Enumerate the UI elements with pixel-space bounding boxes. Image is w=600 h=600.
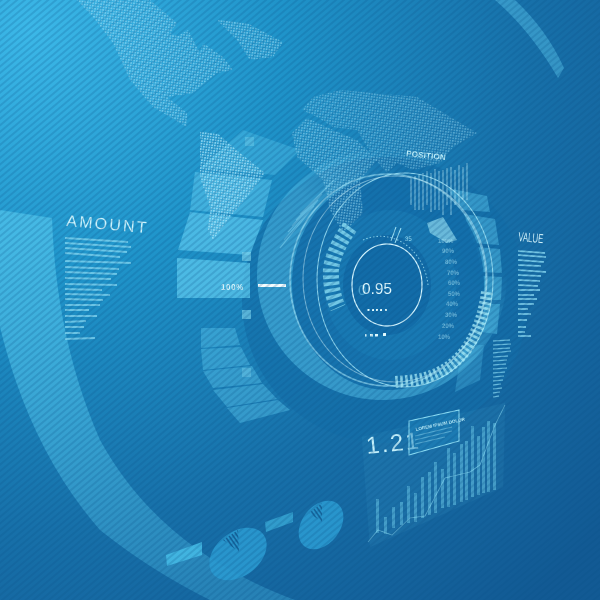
trend line	[368, 405, 505, 542]
ring block: lower left group	[201, 328, 290, 423]
hatched wedge	[309, 503, 322, 522]
heading POSITION: POSITION	[406, 149, 446, 162]
ring block: left upper	[190, 172, 272, 217]
gauge percent scale: 60%	[448, 281, 461, 287]
gauge percent scale: 10%	[438, 335, 451, 341]
gauge value 0.95: 0	[358, 282, 366, 299]
heading AMOUNT: AMOUNT	[66, 213, 149, 237]
inner mid ring	[324, 210, 456, 360]
map: North America	[77, 0, 233, 127]
gauge percent scale: 70%	[447, 271, 460, 277]
tick slash marks	[391, 227, 401, 243]
callout box: LOREM IPSUM DOLOR	[415, 416, 466, 432]
value 1.21: 1.21	[365, 427, 422, 460]
segmented outer ring	[177, 130, 502, 423]
map: Australia	[427, 217, 457, 243]
gauge discs	[257, 150, 507, 400]
amount bars	[65, 238, 131, 339]
label 100%: 100%	[221, 283, 244, 292]
gauge value 0.95: 0.95	[362, 281, 392, 298]
pie chart right	[289, 492, 353, 558]
value bars	[518, 251, 546, 336]
ring block: left middle	[177, 258, 250, 298]
bars	[376, 421, 496, 534]
thin outer ring	[317, 173, 493, 387]
gauge percent scale: 50%	[448, 292, 461, 298]
map: South America	[200, 132, 265, 240]
callout box	[409, 410, 466, 455]
gauge percent scale	[438, 239, 461, 341]
ring block: right group	[447, 188, 502, 334]
second outer ring	[290, 174, 486, 386]
gauge percent scale: 80%	[445, 260, 458, 266]
gauge small marks	[365, 309, 387, 336]
map: Greenland	[217, 20, 283, 60]
pointer bar	[258, 284, 286, 287]
pie chart left	[199, 517, 277, 591]
gauge rings	[290, 173, 493, 387]
ring block: upper left	[200, 130, 300, 175]
position bars	[411, 163, 467, 215]
small square markers	[242, 137, 254, 377]
gauge label 35: 35	[405, 237, 412, 243]
gauge percent scale: 20%	[442, 324, 455, 330]
third outer ring	[303, 176, 487, 382]
gauge percent scale: 100%	[438, 239, 454, 245]
lower right small bars	[493, 340, 511, 397]
hatched wedge	[223, 530, 239, 552]
map: Europe and Asia	[302, 90, 477, 173]
right hatched arc	[395, 292, 487, 382]
map: Africa	[292, 118, 377, 233]
dotted tick arc	[363, 236, 428, 285]
gauge percent scale: 40%	[446, 302, 459, 308]
ring block: left middle upper	[178, 212, 263, 255]
dark inner disc	[292, 176, 484, 390]
inner core	[343, 235, 431, 335]
large sweeping arc, top right	[495, 0, 564, 78]
heading VALUE: VALUE	[518, 230, 544, 247]
light disc	[257, 150, 507, 400]
panel backing	[362, 403, 505, 547]
dark outer disc	[242, 157, 528, 443]
gauge percent scale: 90%	[442, 249, 455, 255]
left hatched arc	[331, 227, 350, 308]
pie tag right	[265, 512, 293, 532]
gauge left tick band	[280, 180, 334, 248]
main white inner circle	[352, 244, 422, 326]
large sweeping arc, lower left	[0, 210, 295, 600]
gauge percent scale: 30%	[445, 313, 458, 319]
chart panel	[362, 403, 505, 547]
ring block: lower right	[455, 345, 484, 392]
pie tag left	[166, 542, 202, 566]
